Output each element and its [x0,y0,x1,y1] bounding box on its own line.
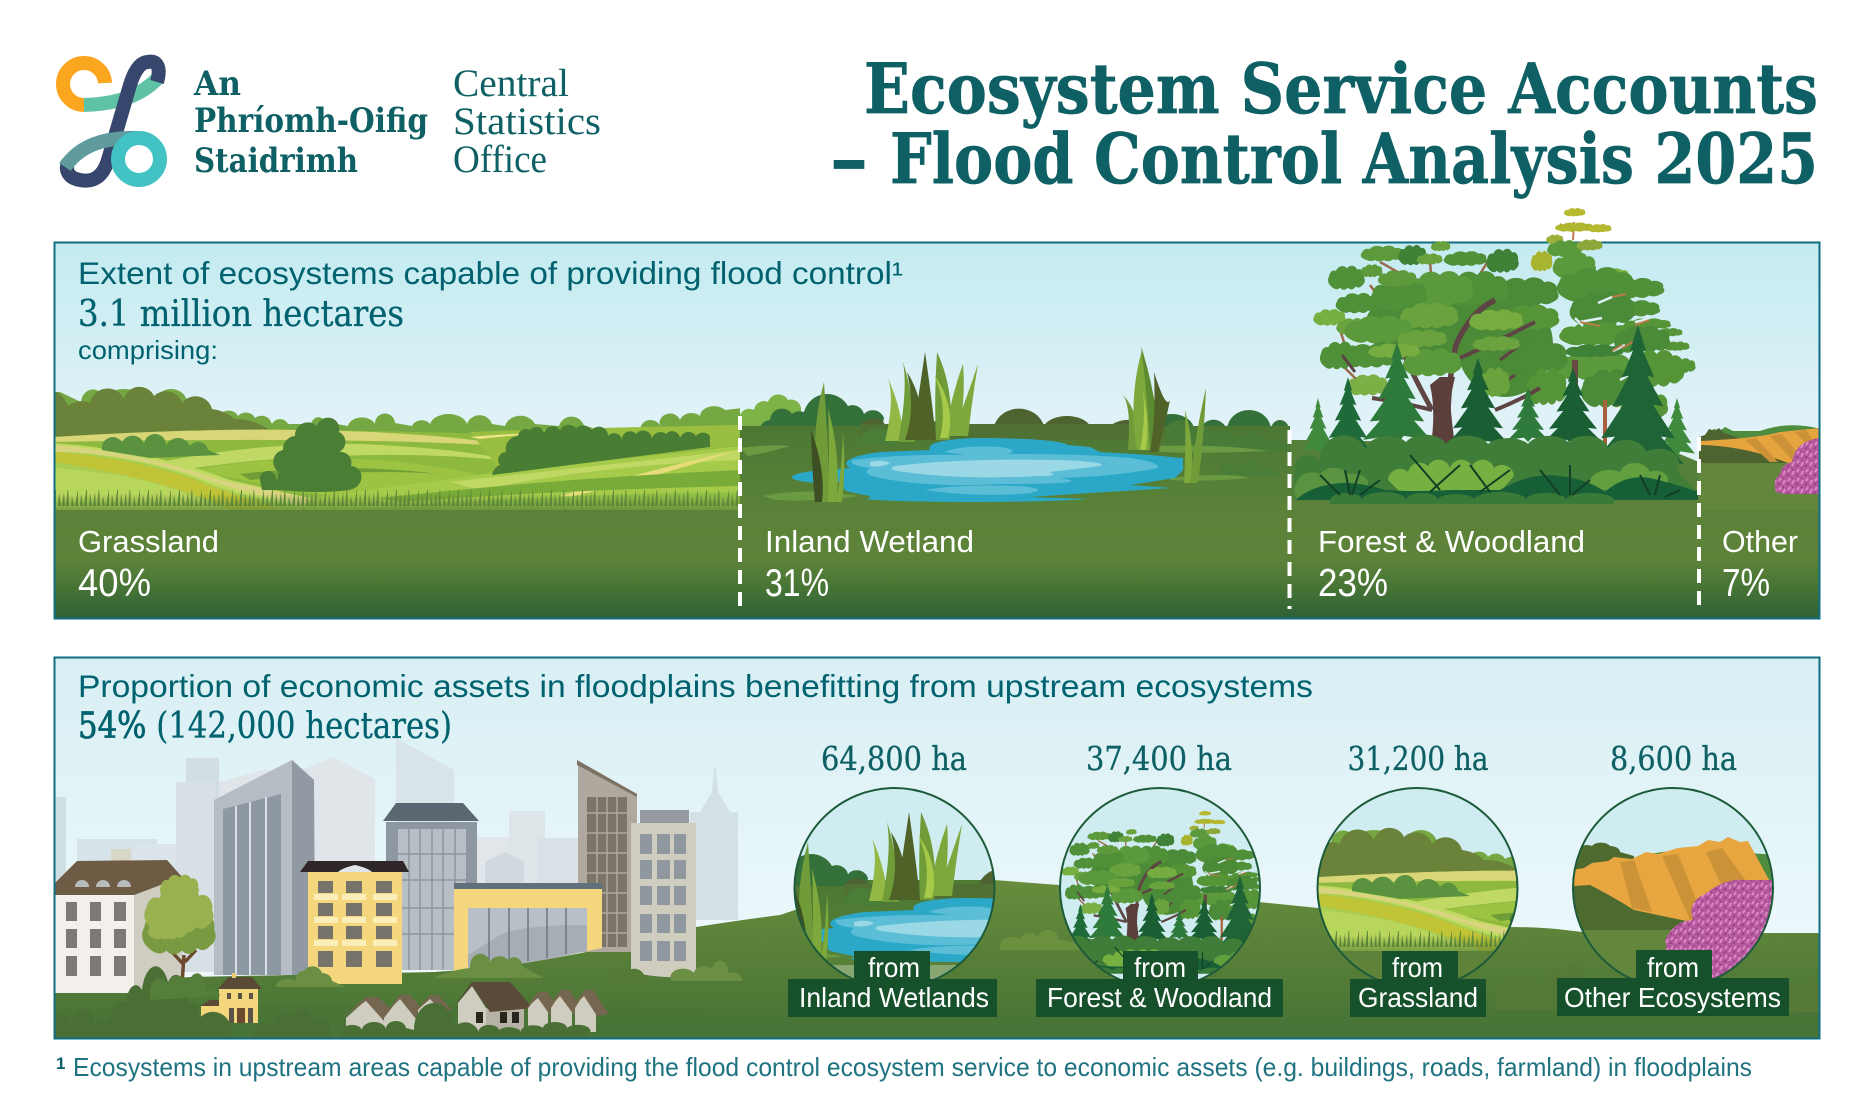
label: forest and woodland: 23% [1318,562,1388,605]
heading: comprising: [78,335,218,365]
small houses [342,982,609,1036]
dashed dividers [740,416,1699,611]
label: from forest and woodland: from [1134,952,1186,983]
ground band [54,500,1820,618]
pale office block [631,810,696,977]
label: from other ecosystems: Other Ecosystems [1564,982,1781,1013]
logo text: English [453,62,601,181]
brown tall tower [577,760,637,952]
foreground shrubs [114,966,590,1036]
circle: other ecosystems [1572,787,1774,978]
scene: other [1699,425,1818,500]
grey glass tower [214,760,315,975]
label: from forest and woodland [1036,951,1283,1017]
footnote: 1 [56,1054,65,1073]
logo text: English: Statistics [453,100,601,143]
scene: inland wetland [740,346,1290,510]
label: from grassland: Grassland [1358,982,1478,1013]
label: grassland [78,524,219,605]
logo text: Irish: An [193,64,241,104]
panel border [54,658,1820,1038]
heading [78,668,1313,747]
logo text: Irish [193,64,428,181]
white townhouse [55,849,182,993]
scene: grassland [54,387,760,518]
hectares: 31,200: 31,200 ha [1348,739,1488,778]
small yellow house [200,973,262,1023]
city scene [54,738,1820,1040]
yellow apartment block [300,861,409,984]
label: inland wetland: Inland Wetland [765,524,974,559]
heading: Proportion of economic assets in floodplains benefitting from upstream ecosystems [78,668,1313,704]
logo text: Irish: Staidrimh [194,141,358,181]
label: forest and woodland [1318,524,1585,605]
circle: forest and woodland [1059,787,1261,979]
label: from inland wetlands: Inland Wetlands [799,982,989,1013]
panel: economic assets [54,658,1875,1040]
heading [78,255,903,365]
green bushes [276,954,742,987]
label: from grassland [1350,951,1486,1017]
hill [54,880,1820,1040]
logo text: English: Office [453,138,547,181]
logo text: English: Central [453,62,569,105]
hectares: 8,600: 8,600 ha [1610,739,1737,778]
label: grassland: 40% [78,562,151,605]
logo text: Irish: Phríomh-Oifig [194,101,428,141]
panel: extent of ecosystems [54,208,1825,619]
tree [142,875,216,985]
hectares: 37,400: 37,400 ha [1086,739,1232,778]
label: from forest and woodland: Forest & Woodland [1047,982,1272,1013]
label: other: Other [1722,524,1798,559]
low yellow hall [454,883,602,973]
label: inland wetland: 31% [765,562,829,605]
label: from grassland: from [1392,952,1443,983]
label: from other ecosystems [1557,950,1789,1016]
hectares: 64,800: 64,800 ha [821,739,967,778]
logo mark [63,62,160,181]
label: forest and woodland: Forest & Woodland [1318,524,1585,559]
footnote: Ecosystems in upstream areas capable of providing the flood control ecosystem service to economic assets (e.g. buildings, roads, farmland) in floodplains [73,1052,1752,1082]
label: from inland wetlands: from [868,952,920,983]
circle: grassland [1316,787,1518,979]
label: other [1722,524,1798,605]
label: from other ecosystems: from [1647,952,1699,983]
label: from inland wetlands [788,951,997,1017]
scene: forest and woodland [1290,208,1699,504]
title [830,49,1818,200]
central glazed tower [383,803,479,970]
background skyline [55,738,738,972]
label: other: 7% [1722,562,1770,605]
label: inland wetland [765,524,974,605]
logo: Central Statistics Office [63,62,601,181]
heading: Extent of ecosystems capable of providing flood control¹ [78,255,903,291]
title: – [830,119,868,200]
circle: inland wetlands [794,787,996,979]
heading: 54% (142,000 hectares) [78,706,452,747]
heading: 3.1 million hectares [78,294,404,335]
panel border [54,242,1820,618]
right ground bushes [1000,930,1820,1012]
label: grassland: Grassland [78,524,219,559]
